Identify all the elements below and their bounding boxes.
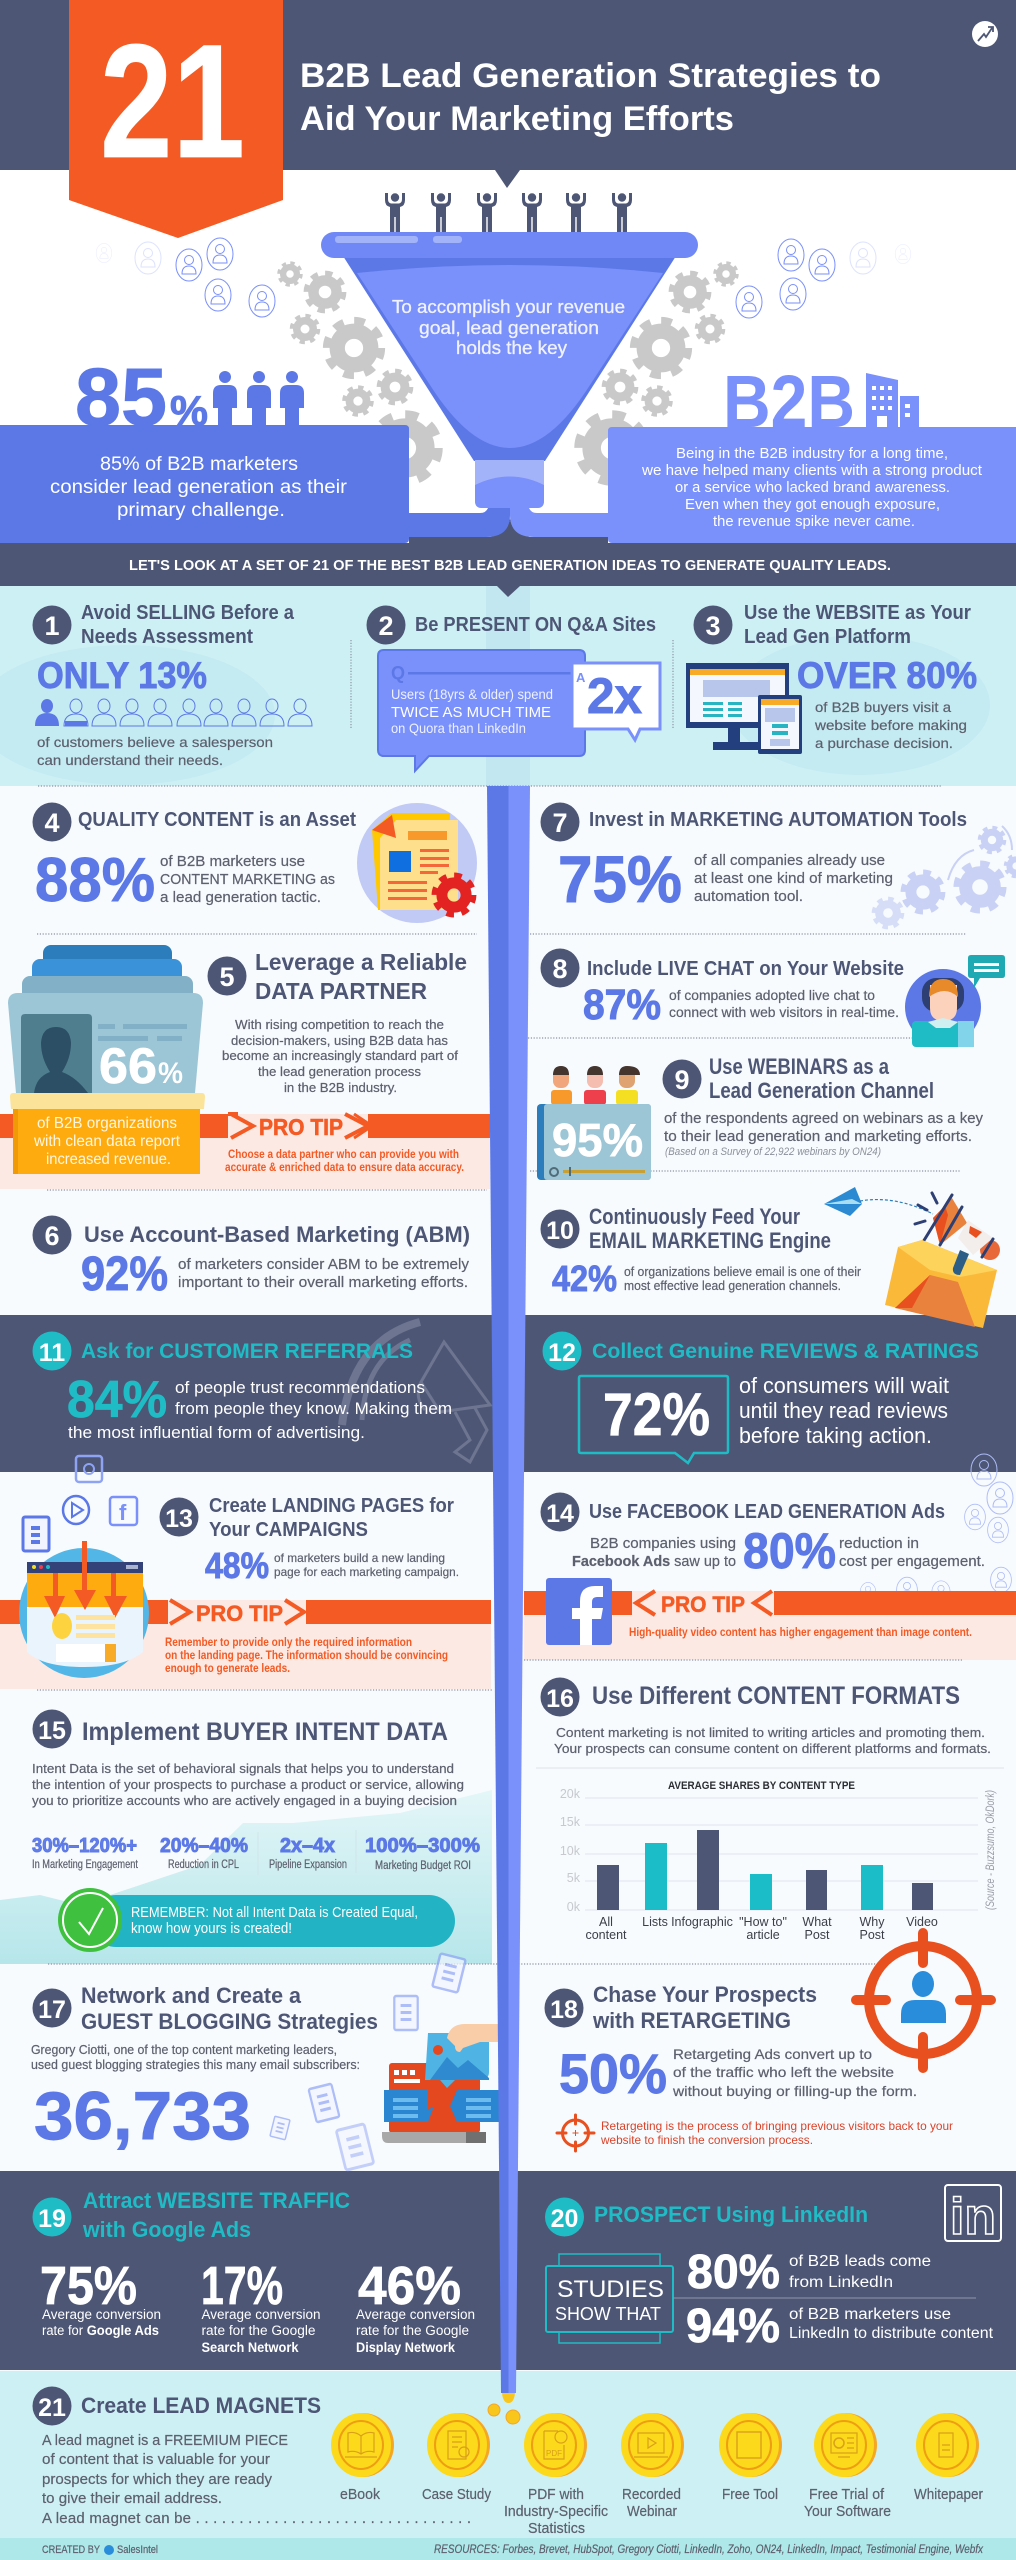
right blue panel: we have helped many clients with a strong product bbox=[641, 463, 982, 479]
icon: data cards with 66 percent: increased revenue. bbox=[46, 1151, 171, 1168]
strategy 13: 48% bbox=[205, 1545, 269, 1586]
pro tip band: strategy 13: on the landing page. The information should be convincing bbox=[165, 1648, 448, 1662]
strategy 3: website before making bbox=[814, 717, 967, 733]
icon: paper plane and envelope megaphone bbox=[824, 1187, 1000, 1328]
strategy 7: 75% bbox=[558, 842, 682, 916]
strategy 1 bbox=[32, 602, 312, 768]
strategy 1: Avoid SELLING Before a bbox=[81, 602, 295, 624]
strategy 8 bbox=[540, 948, 904, 1029]
bar chart: Video bbox=[906, 1915, 938, 1929]
strategy 8: Include LIVE CHAT on Your Website bbox=[587, 958, 904, 980]
strategy 18: website to finish the conversion process. bbox=[600, 2133, 813, 2147]
strategy 15: the intention of your prospects to purchase a product or service, allowing bbox=[32, 1778, 464, 1792]
strategy 20: LinkedIn to distribute content bbox=[789, 2325, 994, 2342]
bar chart: Post bbox=[804, 1928, 830, 1942]
bar chart: 0k bbox=[567, 1900, 581, 1914]
panel: dark band strategy 12: 72% bbox=[603, 1381, 710, 1448]
strategy 14: 14 bbox=[546, 1500, 574, 1528]
strategy 8: connect with web visitors in real-time. bbox=[669, 1005, 899, 1020]
strategy 15: you to prioritize accounts who are actively engaged in a buying decision bbox=[32, 1794, 457, 1808]
icon: data cards with 66 percent: of B2B organizations bbox=[37, 1115, 177, 1132]
strategy 16: Your prospects can consume content on different platforms and formats. bbox=[554, 1742, 991, 1756]
title: B2B Lead Generation Strategies to bbox=[300, 57, 881, 95]
bar chart: Lists bbox=[642, 1915, 668, 1929]
icon: target bbox=[856, 1933, 991, 2068]
strategy 3: Use the WEBSITE as Your bbox=[744, 602, 971, 624]
strategy 1: Needs Assessment bbox=[81, 626, 253, 648]
strategy 2: Users (18yrs & older) spend bbox=[391, 686, 553, 702]
strategy 16: Use Different CONTENT FORMATS bbox=[592, 1682, 960, 1710]
strategy 7: of all companies already use bbox=[694, 853, 885, 869]
strategy 4: of B2B marketers use bbox=[160, 854, 305, 870]
icon: support agent bbox=[905, 955, 1005, 1047]
strategy 6 bbox=[32, 1216, 470, 1301]
strategy 3: 3 bbox=[705, 611, 721, 641]
coin: case study bbox=[422, 2413, 492, 2503]
stat: B2B with buildings: B2B bbox=[723, 360, 855, 443]
strategy 17: used guest blogging strategies this many email subscribers: bbox=[31, 2057, 360, 2072]
pro tip band: strategy 5: PRO TIP bbox=[259, 1114, 343, 1140]
strategy 14 bbox=[524, 1454, 1016, 1660]
coin: PDF bbox=[504, 2413, 608, 2537]
strategy 17: Network and Create a bbox=[81, 1983, 302, 2008]
panel: dark band strategy 11: 84% bbox=[67, 1371, 167, 1429]
panel: dark band strategy 11: from people they know. Making them bbox=[175, 1399, 452, 1418]
strategy 18: without buying or filling-up the form. bbox=[672, 2083, 917, 2099]
strategy 1: ONLY 13% bbox=[37, 655, 207, 696]
strategy 1: can understand their needs. bbox=[37, 752, 223, 768]
strategy 20: 94% bbox=[686, 2300, 780, 2353]
strategy 15: 20%–40% bbox=[160, 1835, 248, 1857]
strategy 14: cost per engagement. bbox=[839, 1554, 985, 1570]
title: Aid Your Marketing Efforts bbox=[300, 100, 734, 138]
strategy 3: a purchase decision. bbox=[815, 735, 953, 751]
strategy 21: of content that is valuable for your bbox=[42, 2451, 270, 2468]
strategy 15: Implement BUYER INTENT DATA bbox=[82, 1718, 448, 1746]
strategy 15: Marketing Budget ROI bbox=[375, 1860, 471, 1872]
strategy 6: Use Account-Based Marketing (ABM) bbox=[84, 1222, 470, 1247]
bar chart: Infographic bbox=[671, 1915, 733, 1929]
strategy 15: 2x–4x bbox=[280, 1835, 335, 1857]
panel: strategies 1 to 3 bbox=[0, 586, 1016, 786]
left blue panel: consider lead generation as their bbox=[50, 477, 348, 498]
strategy 20: from LinkedIn bbox=[789, 2274, 893, 2291]
coin: recorded webinar bbox=[621, 2413, 684, 2520]
title bbox=[300, 57, 881, 138]
bar chart: 20k bbox=[560, 1787, 581, 1801]
banner: LET'S LOOK AT A SET OF 21 OF THE BEST B2B LEAD GENERATION IDEAS TO GENERATE QUALITY LEADS. bbox=[129, 558, 891, 574]
strategy 14: PRO TIP bbox=[661, 1592, 745, 1617]
strategy 20: of B2B marketers use bbox=[789, 2306, 951, 2323]
strategy 3: OVER 80% bbox=[797, 655, 977, 696]
strategy 3: of B2B buyers visit a bbox=[815, 699, 951, 715]
strategy 18 bbox=[544, 1933, 991, 2151]
strategy 18: Retargeting Ads convert up to bbox=[673, 2046, 872, 2062]
strategy 9: Use WEBINARS as a bbox=[709, 1054, 890, 1079]
strategy 15: Intent Data is the set of behavioral signals that helps you to understand bbox=[32, 1762, 454, 1776]
coin: whitepaper: Whitepaper bbox=[914, 2487, 983, 2503]
strategy 3: Lead Gen Platform bbox=[744, 626, 911, 648]
strategy 14: B2B companies using bbox=[590, 1536, 736, 1552]
strategy 5 bbox=[8, 945, 467, 1174]
strategy 14: 80% bbox=[743, 1523, 836, 1579]
gears left and right bbox=[279, 263, 737, 481]
number ribbon: 21 bbox=[100, 11, 245, 192]
strategy 10 bbox=[540, 1187, 1000, 1328]
strategy 16: Content marketing is not limited to writing articles and promoting them. bbox=[556, 1726, 985, 1740]
strategy 21: prospects for which they are ready bbox=[42, 2471, 272, 2488]
icon: data cards with 66 percent: with clean data report bbox=[33, 1133, 181, 1150]
panel: dark band strategy 12 bbox=[542, 1332, 979, 1463]
coin: PDF: Statistics bbox=[528, 2521, 585, 2537]
strategy 20: of B2B leads come bbox=[789, 2253, 931, 2270]
coin: PDF: PDF with bbox=[528, 2487, 584, 2503]
callout: studies show that: SHOW THAT bbox=[555, 2304, 661, 2324]
strategy 6: 6 bbox=[44, 1221, 60, 1251]
strategy 9: (Based on a Survey of 22,922 webinars by ON24) bbox=[665, 1146, 881, 1158]
strategy 8: 8 bbox=[552, 954, 568, 984]
icon: landing page illustration bbox=[19, 1456, 149, 1678]
white hero background bbox=[0, 170, 1016, 543]
stat: 85 percent with people: % bbox=[170, 387, 208, 434]
strategy 17 bbox=[31, 1953, 502, 2170]
panel: dark band strategy 11: of people trust recommendations bbox=[175, 1378, 425, 1397]
strategy 14: Use FACEBOOK LEAD GENERATION Ads bbox=[589, 1501, 945, 1523]
strategy 19: rate for the Google bbox=[202, 2323, 316, 2338]
strategy 17: 17 bbox=[38, 1996, 66, 2024]
strategy 21: A lead magnet is a FREEMIUM PIECE bbox=[42, 2432, 288, 2449]
icon: data cards with 66 percent bbox=[8, 945, 205, 1174]
stat: 85 percent with people bbox=[75, 352, 304, 443]
bar chart: 15k bbox=[560, 1815, 581, 1829]
icon: floating documents bbox=[270, 1953, 466, 2170]
pro tip band: strategy 13 bbox=[0, 1600, 491, 1689]
coin: PDF: Industry-Specific bbox=[504, 2504, 608, 2520]
icon: facebook bbox=[546, 1578, 612, 1645]
right blue panel bbox=[608, 427, 1016, 543]
panel: dark band strategy 12: Collect Genuine REVIEWS & RATINGS bbox=[592, 1340, 979, 1363]
strategy 19: Display Network bbox=[356, 2340, 455, 2355]
icon: automation gears bbox=[874, 826, 1016, 927]
strategy 20: 80% bbox=[687, 2246, 780, 2299]
strategy 10: of organizations believe email is one of their bbox=[624, 1264, 862, 1279]
footer: SalesIntel bbox=[117, 2544, 158, 2556]
strategy 16: 16 bbox=[546, 1685, 574, 1713]
bar chart: AVERAGE SHARES BY CONTENT TYPE bbox=[668, 1780, 855, 1792]
strategy 2: 2 bbox=[378, 611, 394, 641]
funnel: goal, lead generation bbox=[419, 318, 599, 338]
icon: data cards with 66 percent: 66 bbox=[99, 1038, 157, 1094]
panel: dark band strategy 11: Ask for CUSTOMER REFERRALS bbox=[81, 1340, 413, 1363]
strategy 7 bbox=[540, 802, 1016, 927]
strategy 10: most effective lead generation channels. bbox=[624, 1278, 841, 1293]
coin: free trial: Free Trial of bbox=[809, 2487, 885, 2503]
strategy 10: 10 bbox=[546, 1217, 574, 1245]
strategy 9: Lead Generation Channel bbox=[709, 1078, 934, 1103]
coin: free trial bbox=[804, 2413, 891, 2520]
strategy 15: 100%–300% bbox=[365, 1835, 480, 1857]
stat: 85 percent with people: 85 bbox=[75, 352, 167, 443]
panel: dark band strategy 12: before taking action. bbox=[739, 1423, 932, 1448]
strategy 17: Gregory Ciotti, one of the top content marketing leaders, bbox=[31, 2042, 337, 2057]
bar chart: (Source - Buzzsumo, OkDork) bbox=[985, 1790, 997, 1910]
funnel outlet pipes bbox=[409, 508, 608, 537]
pro tip band: strategy 13: PRO TIP bbox=[196, 1601, 283, 1626]
left blue panel bbox=[0, 425, 409, 543]
coin: recorded webinar: Recorded bbox=[622, 2487, 681, 2503]
header band bbox=[0, 0, 1016, 188]
strategy 16 bbox=[536, 1678, 1004, 1942]
footer bbox=[42, 2544, 984, 2556]
strategy 20: 20 bbox=[551, 2205, 578, 2233]
bar chart: All bbox=[599, 1915, 613, 1929]
strategy 10: 42% bbox=[552, 1258, 617, 1299]
strategy 19: 75% bbox=[40, 2256, 137, 2316]
strategy 21: A lead magnet can be . . . . . . . . . . . . . . . . . . . . . . . . . . . . . . . . bbox=[42, 2510, 471, 2527]
banner bbox=[0, 543, 1016, 586]
strategy 5: Leverage a Reliable bbox=[255, 949, 467, 975]
strategy 15 bbox=[32, 1710, 480, 1952]
callout: remember bbox=[58, 1888, 455, 1952]
bar chart: 5k bbox=[567, 1871, 581, 1885]
strategy 19: Average conversion bbox=[356, 2307, 475, 2322]
callout: studies show that: STUDIES bbox=[557, 2276, 664, 2303]
strategy 4: QUALITY CONTENT is an Asset bbox=[78, 809, 356, 831]
callout: studies show that bbox=[546, 2254, 673, 2343]
strategy 4: 4 bbox=[44, 808, 60, 838]
strategy 6: important to their overall marketing efforts. bbox=[178, 1275, 468, 1291]
strategy 8: of companies adopted live chat to bbox=[669, 988, 875, 1003]
strategy 5: DATA PARTNER bbox=[255, 978, 427, 1004]
coin: free trial: Your Software bbox=[804, 2504, 891, 2520]
strategy 2: TWICE AS MUCH TIME bbox=[391, 704, 551, 721]
strategy 7: automation tool. bbox=[694, 889, 803, 905]
strategy 13: page for each marketing campaign. bbox=[274, 1565, 459, 1579]
strategy 9: of the respondents agreed on webinars as a key bbox=[664, 1111, 984, 1127]
icon: linkedin: in bbox=[950, 2188, 996, 2246]
pro tip band: strategy 13: enough to generate leads. bbox=[165, 1661, 290, 1675]
right blue panel: the revenue spike never came. bbox=[713, 514, 915, 530]
bar chart: "How to" bbox=[739, 1915, 787, 1929]
icon: webinar screen with 95 percent: 95% bbox=[552, 1114, 643, 1166]
bar chart: Why bbox=[860, 1915, 885, 1929]
strategy 14: Facebook Ads saw up to bbox=[572, 1554, 736, 1570]
strategy 19: 17% bbox=[201, 2256, 283, 2316]
strategy 20 bbox=[545, 2185, 1001, 2353]
strategy 2: on Quora than LinkedIn bbox=[391, 720, 526, 736]
strategy 8: 87% bbox=[583, 981, 661, 1029]
strategy 3 bbox=[686, 602, 977, 754]
strategy 13: Create LANDING PAGES for bbox=[209, 1495, 454, 1517]
pro tip band: strategy 5 bbox=[0, 1114, 490, 1189]
logo badge bbox=[972, 21, 998, 47]
strategy 2: 2x bbox=[587, 668, 642, 724]
strategy 7: Invest in MARKETING AUTOMATION Tools bbox=[589, 809, 967, 831]
strategy 18: Retargeting is the process of bringing previous visitors back to your bbox=[601, 2119, 953, 2133]
panel: dark band strategy 12: until they read reviews bbox=[739, 1398, 948, 1423]
footer: CREATED BY bbox=[42, 2544, 101, 2556]
icon: blogging illustration bbox=[382, 2024, 502, 2143]
coin: recorded webinar: Webinar bbox=[627, 2504, 677, 2520]
strategy 2: A bbox=[576, 670, 586, 685]
strategy 20: PROSPECT Using LinkedIn bbox=[594, 2202, 868, 2227]
strategy 4 bbox=[32, 802, 477, 923]
strategy 10: Continuously Feed Your bbox=[589, 1204, 800, 1229]
strategy 15 mountain background bbox=[0, 1790, 492, 1964]
strategy 18: 18 bbox=[550, 1996, 578, 2024]
icon: webinar screen with 95 percent bbox=[537, 1066, 651, 1180]
strategy 21: Create LEAD MAGNETS bbox=[81, 2393, 321, 2418]
strategy 5: decision-makers, using B2B data has bbox=[231, 1034, 448, 1048]
coin: case study: Case Study bbox=[422, 2487, 492, 2503]
panel: bottom section background bbox=[0, 2371, 1016, 2560]
strategy 5: With rising competition to reach the bbox=[235, 1018, 444, 1032]
strategy 2 bbox=[366, 606, 660, 771]
funnel: To accomplish your revenue bbox=[392, 297, 625, 317]
callout: remember: know how yours is created! bbox=[131, 1921, 292, 1937]
strategy 19: 19 bbox=[38, 2205, 66, 2233]
strategy 1: of customers believe a salesperson bbox=[37, 734, 273, 750]
strategy 19: 46% bbox=[358, 2256, 461, 2316]
panel: dark band strategy 11: 11 bbox=[39, 1339, 65, 1367]
pro tip band: strategy 13: Remember to provide only the required information bbox=[165, 1635, 412, 1649]
strategy 1: 1 bbox=[44, 611, 60, 641]
right blue panel: Being in the B2B industry for a long time, bbox=[676, 446, 948, 462]
funnel bbox=[321, 193, 698, 508]
strategy 6: 92% bbox=[81, 1248, 168, 1301]
strategy 15: Reduction in CPL bbox=[168, 1859, 239, 1871]
strategy 13: of marketers build a new landing bbox=[274, 1551, 445, 1565]
strategy 6: of marketers consider ABM to be extremely bbox=[178, 1257, 470, 1273]
bar chart: Post bbox=[859, 1928, 885, 1942]
strategy 10: EMAIL MARKETING Engine bbox=[589, 1228, 831, 1253]
strategy 9 bbox=[537, 1054, 984, 1180]
bar chart: 10k bbox=[560, 1844, 581, 1858]
floating people icons bbox=[96, 238, 911, 318]
strategy 4: CONTENT MARKETING as bbox=[160, 872, 335, 888]
strategy 2: Be PRESENT ON Q&A Sites bbox=[415, 614, 656, 636]
coin: PDF: PDF bbox=[546, 2449, 562, 2458]
strategy 5: become an increasingly standard part of bbox=[222, 1049, 459, 1063]
pro tip band: strategy 5: Choose a data partner who can provide you with bbox=[228, 1147, 459, 1161]
number ribbon bbox=[69, 0, 283, 238]
strategy 18: Chase Your Prospects bbox=[593, 1982, 817, 2007]
panel: dark band strategy 12: of consumers will wait bbox=[739, 1373, 949, 1398]
strategy 17: GUEST BLOGGING Strategies bbox=[81, 2009, 378, 2034]
central funnel stream bbox=[487, 786, 530, 2424]
bar chart bbox=[560, 1780, 997, 1942]
strategy 13 bbox=[19, 1456, 459, 1678]
icon: data cards with 66 percent: % bbox=[158, 1057, 183, 1090]
strategy 21: to give their email address. bbox=[42, 2490, 222, 2507]
coin: free tool: Free Tool bbox=[722, 2487, 778, 2503]
strategy 18: with RETARGETING bbox=[592, 2008, 791, 2033]
strategy 19 bbox=[32, 2188, 475, 2355]
strategy 18: of the traffic who left the website bbox=[673, 2064, 894, 2080]
strategy 7: at least one kind of marketing bbox=[694, 871, 893, 887]
left blue panel: 85% of B2B marketers bbox=[100, 454, 298, 475]
strategy 4: 88% bbox=[35, 846, 155, 915]
strategy 19: rate for Google Ads bbox=[42, 2323, 159, 2338]
strategy 17: 36,733 bbox=[34, 2078, 251, 2154]
strategy 19: Attract WEBSITE TRAFFIC bbox=[83, 2188, 350, 2213]
coin: eBook: eBook bbox=[340, 2487, 381, 2503]
strategy 5: 5 bbox=[219, 962, 235, 992]
strategy 5: the lead generation process bbox=[258, 1065, 421, 1079]
panel: dark band strategies 19 and 20 bbox=[0, 2171, 1016, 2370]
left blue panel: primary challenge. bbox=[117, 500, 285, 521]
strategy 7: 7 bbox=[552, 808, 568, 838]
right blue panel: or a service who lacked brand awareness. bbox=[675, 480, 950, 496]
funnel outlet shadow bbox=[409, 518, 608, 543]
strategy 9: 9 bbox=[674, 1065, 690, 1095]
strategy 4: a lead generation tactic. bbox=[160, 890, 321, 906]
coin: eBook bbox=[331, 2413, 394, 2503]
icon: small target bbox=[557, 2115, 594, 2151]
strategy 19: rate for the Google bbox=[356, 2323, 469, 2338]
strategy 19: Average conversion bbox=[202, 2307, 320, 2322]
strategy 13: Your CAMPAIGNS bbox=[209, 1519, 368, 1541]
funnel: holds the key bbox=[456, 338, 567, 358]
strategy 2: Q bbox=[391, 663, 405, 683]
panel: dark band strategy 12: 12 bbox=[548, 1339, 576, 1367]
bar chart: What bbox=[802, 1915, 832, 1929]
strategy 18: 50% bbox=[559, 2042, 667, 2105]
icon: document with gear bbox=[357, 803, 477, 923]
strategy 15: In Marketing Engagement bbox=[32, 1859, 139, 1871]
strategy 21: 21 bbox=[38, 2394, 66, 2422]
coin: free tool bbox=[719, 2413, 782, 2503]
strategy 14: reduction in bbox=[839, 1536, 919, 1552]
pro tip band: strategy 5: accurate & enriched data to ensure data accuracy. bbox=[225, 1160, 464, 1174]
strategy 15: Pipeline Expansion bbox=[269, 1859, 347, 1871]
bar chart: content bbox=[585, 1928, 627, 1942]
strategy 13: 13 bbox=[165, 1505, 193, 1533]
right blue panel: Even when they got enough exposure, bbox=[685, 497, 940, 513]
strategy 19: with Google Ads bbox=[82, 2217, 251, 2242]
strategy 19: Average conversion bbox=[42, 2307, 161, 2322]
coin: whitepaper bbox=[914, 2413, 983, 2503]
strategy 9: to their lead generation and marketing efforts. bbox=[664, 1129, 972, 1145]
callout: remember: REMEMBER: Not all Intent Data is Created Equal, bbox=[131, 1905, 418, 1921]
strategy 21 bbox=[32, 2386, 983, 2537]
strategy 19: Search Network bbox=[202, 2340, 299, 2355]
strategy 15: 15 bbox=[38, 1717, 66, 1745]
icon: landing page illustration: f bbox=[119, 1500, 127, 1525]
strategy 15: 30%–120%+ bbox=[32, 1835, 137, 1857]
bar chart: article bbox=[746, 1928, 780, 1942]
panel: dark band strategy 11: the most influential form of advertising. bbox=[68, 1423, 365, 1442]
strategy 5: in the B2B industry. bbox=[284, 1081, 397, 1095]
panel: dark band strategy 11 bbox=[0, 1315, 1016, 1472]
